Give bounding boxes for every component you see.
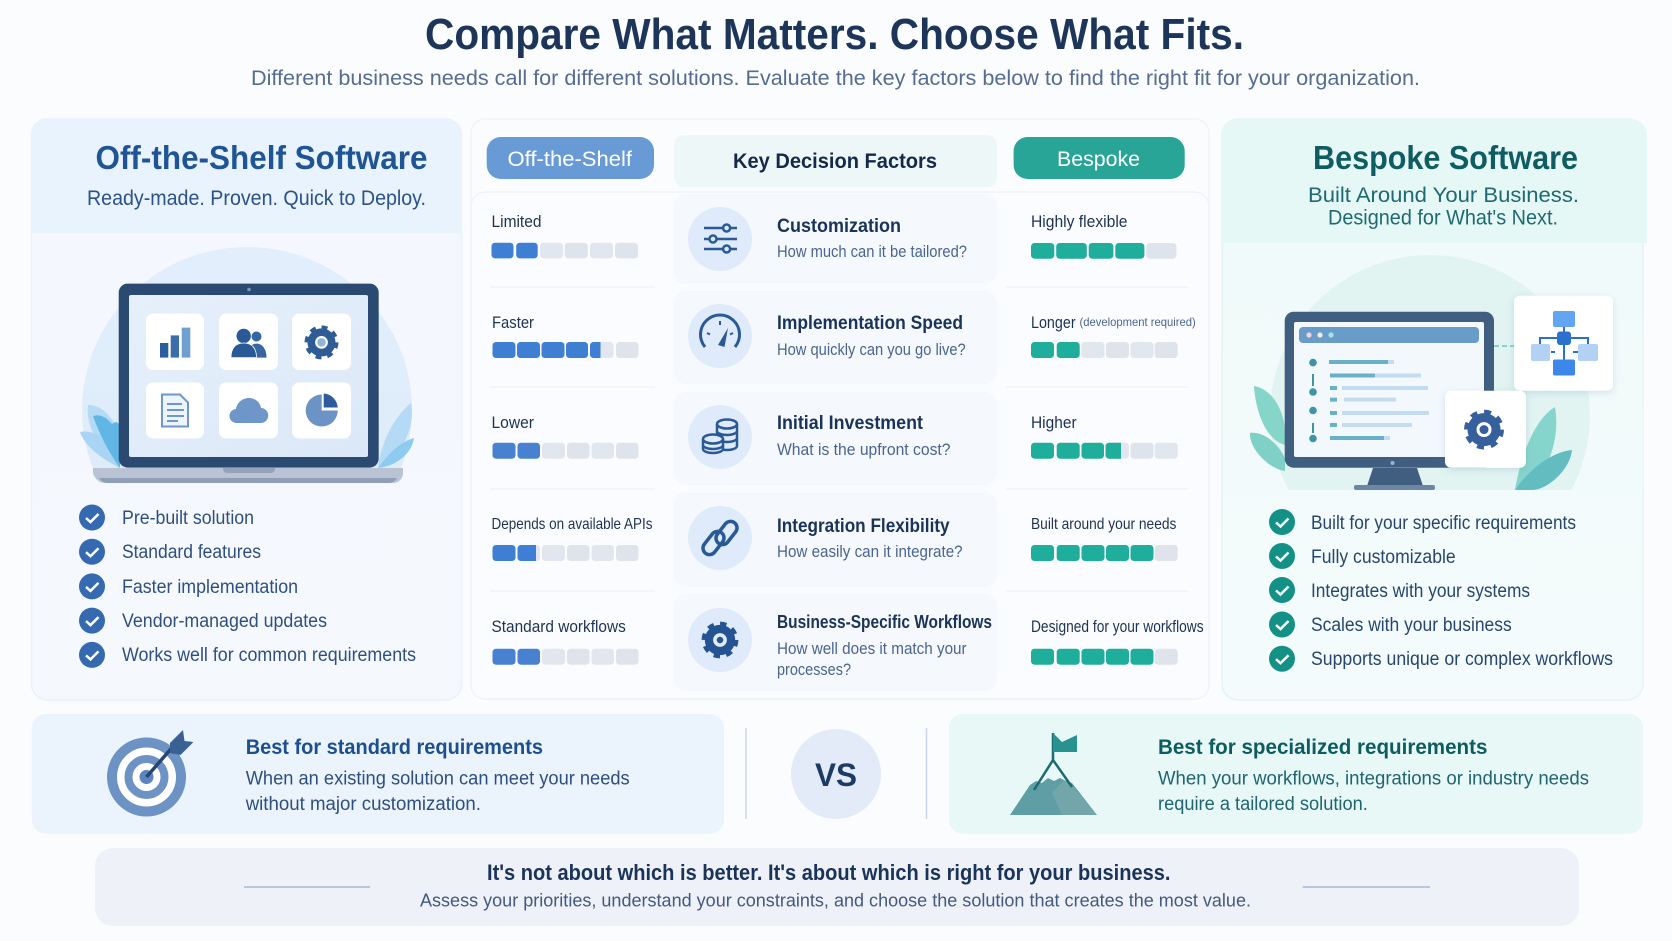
item: faster implementation: Faster implementation bbox=[122, 577, 298, 598]
left rating: faster bbox=[492, 314, 638, 358]
left rating: depends on available APIs bbox=[492, 516, 652, 561]
item: built for your specific requirements: Built for your specific requirements bbox=[1311, 513, 1576, 534]
panel header bbox=[32, 119, 462, 233]
icon: cloud tile bbox=[219, 382, 278, 438]
item: scales with your business: Scales with your business bbox=[1311, 615, 1512, 636]
left rating: lower bbox=[492, 414, 638, 459]
factor: customization: How much can it be tailored? bbox=[777, 242, 967, 261]
factor: business-specific workflows: Business-Specific Workflows bbox=[777, 611, 992, 632]
column header: key decision factors: Key Decision Factors bbox=[733, 149, 937, 173]
factor: initial investment: What is the upfront cost? bbox=[777, 440, 950, 459]
item: supports unique or complex workflows: Supports unique or complex workflows bbox=[1311, 649, 1613, 670]
factor: initial investment bbox=[777, 412, 950, 459]
item: vendor-managed updates: Vendor-managed updates bbox=[122, 611, 327, 632]
text: specialized requirements bbox=[1158, 735, 1589, 815]
factor: integration flexibility: How easily can it integrate? bbox=[777, 542, 963, 561]
text: specialized requirements: When your workflows, integrations or industry needs bbox=[1158, 768, 1589, 789]
icon: gear tile bbox=[1445, 391, 1526, 468]
text: specialized requirements: Best for specialized requirements bbox=[1158, 735, 1487, 759]
row: customization bbox=[492, 194, 1176, 284]
icon: workflow gear bbox=[688, 608, 752, 672]
right rating: longer bbox=[1031, 314, 1196, 358]
vs divider bbox=[746, 728, 926, 819]
item: pre-built solution bbox=[79, 504, 254, 530]
right rating: longer: Longer bbox=[1031, 314, 1076, 332]
panel header: Ready-made. Proven. Quick to Deploy. bbox=[87, 187, 426, 210]
item: faster implementation bbox=[79, 573, 298, 599]
callout: best for standard requirements bbox=[32, 714, 724, 834]
column header: off-the-shelf bbox=[487, 137, 654, 179]
right rating: designed for your workflows: Designed for your workflows bbox=[1031, 618, 1204, 636]
left rating: limited: Limited bbox=[492, 213, 542, 231]
icon: document tile bbox=[146, 382, 204, 438]
factor: implementation speed: Implementation Speed bbox=[777, 312, 963, 334]
factor: initial investment: Initial Investment bbox=[777, 412, 923, 434]
factor: implementation speed: How quickly can you go live? bbox=[777, 340, 966, 359]
row: initial investment bbox=[492, 392, 1178, 485]
row: implementation speed bbox=[492, 291, 1196, 384]
footer banner: Assess your priorities, understand your constraints, and choose the solution that creates the most value. bbox=[420, 890, 1251, 911]
text: standard requirements: When an existing solution can meet your needs bbox=[246, 768, 630, 789]
left rating: standard workflows bbox=[492, 618, 638, 665]
panel header: Built Around Your Business. bbox=[1308, 184, 1579, 207]
panel header: Designed for What's Next. bbox=[1328, 206, 1558, 230]
illustration: monitor with workflow tiles bbox=[1250, 255, 1616, 490]
factor: business-specific workflows bbox=[777, 611, 992, 679]
checklist: off-the-shelf bbox=[79, 504, 416, 668]
vs divider: VS bbox=[815, 757, 857, 793]
right rating: highly flexible bbox=[1031, 213, 1176, 259]
icon: gear tile bbox=[292, 314, 351, 370]
text: standard requirements: Best for standard requirements bbox=[246, 735, 543, 759]
footer banner: It's not about which is better. It's about which is right for your business. bbox=[487, 860, 1170, 885]
footer banner bbox=[95, 848, 1579, 926]
panel: off-the-shelf software bbox=[32, 119, 462, 700]
icon: flowchart tile bbox=[1514, 296, 1613, 391]
item: standard features bbox=[79, 539, 261, 565]
right rating: higher: Higher bbox=[1031, 414, 1077, 432]
left rating: lower: Lower bbox=[492, 414, 534, 432]
text: standard requirements bbox=[245, 735, 630, 815]
item: vendor-managed updates bbox=[79, 608, 327, 634]
icon: people tile bbox=[219, 314, 278, 370]
icon: target with arrow bbox=[112, 730, 194, 812]
panel header: Off-the-Shelf Software bbox=[96, 140, 428, 177]
icon: mountain with flag bbox=[1010, 733, 1097, 815]
left rating: limited bbox=[492, 213, 638, 258]
right rating: higher bbox=[1031, 414, 1178, 459]
title: Compare What Matters. Choose What Fits. bbox=[425, 10, 1244, 59]
panel: bespoke software bbox=[1222, 119, 1647, 700]
column header: key decision factors bbox=[674, 135, 997, 187]
factor: customization: Customization bbox=[777, 215, 901, 237]
factor: implementation speed bbox=[777, 312, 966, 359]
left rating: depends on available APIs: Depends on available APIs bbox=[492, 516, 652, 533]
factor: business-specific workflows: How well does it match your bbox=[777, 639, 967, 658]
left rating: faster: Faster bbox=[492, 314, 534, 332]
factor: integration flexibility: Integration Flexibility bbox=[777, 515, 950, 537]
item: works well for common requirements bbox=[79, 642, 416, 668]
text: standard requirements: without major customization. bbox=[245, 794, 481, 815]
item: built for your specific requirements bbox=[1269, 509, 1576, 535]
item: fully customizable bbox=[1269, 543, 1456, 569]
item: pre-built solution: Pre-built solution bbox=[122, 508, 254, 529]
row: integration flexibility bbox=[492, 492, 1178, 587]
panel header: Bespoke Software bbox=[1313, 140, 1578, 177]
factor: business-specific workflows: processes? bbox=[777, 660, 851, 679]
factor: customization bbox=[777, 215, 967, 261]
icon: chain link bbox=[688, 506, 752, 570]
icon: gauge bbox=[688, 304, 752, 368]
icon: coins bbox=[688, 405, 752, 469]
icon: bar chart tile bbox=[146, 314, 204, 370]
column header: bespoke: Bespoke bbox=[1057, 148, 1140, 171]
column header: bespoke bbox=[1014, 137, 1185, 179]
icon: pie chart tile bbox=[292, 382, 351, 438]
right rating: highly flexible: Highly flexible bbox=[1031, 213, 1128, 231]
item: scales with your business bbox=[1269, 612, 1512, 638]
column header: off-the-shelf: Off-the-Shelf bbox=[508, 148, 632, 171]
right rating: longer: (development required) bbox=[1080, 315, 1196, 329]
item: integrates with your systems: Integrates with your systems bbox=[1311, 581, 1530, 602]
right rating: designed for your workflows bbox=[1031, 618, 1204, 665]
panel header bbox=[1222, 119, 1647, 243]
illustration: laptop with app tiles bbox=[80, 247, 414, 483]
right rating: built around your needs: Built around your needs bbox=[1031, 516, 1176, 533]
screen: workflow list bbox=[1309, 359, 1429, 442]
subtitle: Different business needs call for different solutions. Evaluate the key factors below to find the right fit for your organization. bbox=[251, 66, 1420, 90]
item: integrates with your systems bbox=[1269, 577, 1530, 603]
icon: sliders bbox=[688, 207, 752, 271]
left rating: standard workflows: Standard workflows bbox=[492, 618, 626, 636]
right rating: built around your needs bbox=[1031, 516, 1178, 561]
item: fully customizable: Fully customizable bbox=[1311, 547, 1456, 568]
panel: comparison table bbox=[471, 119, 1209, 699]
text: specialized requirements: require a tailored solution. bbox=[1158, 794, 1368, 815]
item: works well for common requirements: Works well for common requirements bbox=[122, 645, 416, 666]
checklist: bespoke bbox=[1269, 509, 1613, 672]
factor: integration flexibility bbox=[777, 515, 963, 561]
callout: best for specialized requirements bbox=[949, 714, 1643, 834]
item: standard features: Standard features bbox=[122, 542, 261, 563]
item: supports unique or complex workflows bbox=[1269, 646, 1613, 672]
row: business-specific workflows bbox=[492, 594, 1204, 691]
